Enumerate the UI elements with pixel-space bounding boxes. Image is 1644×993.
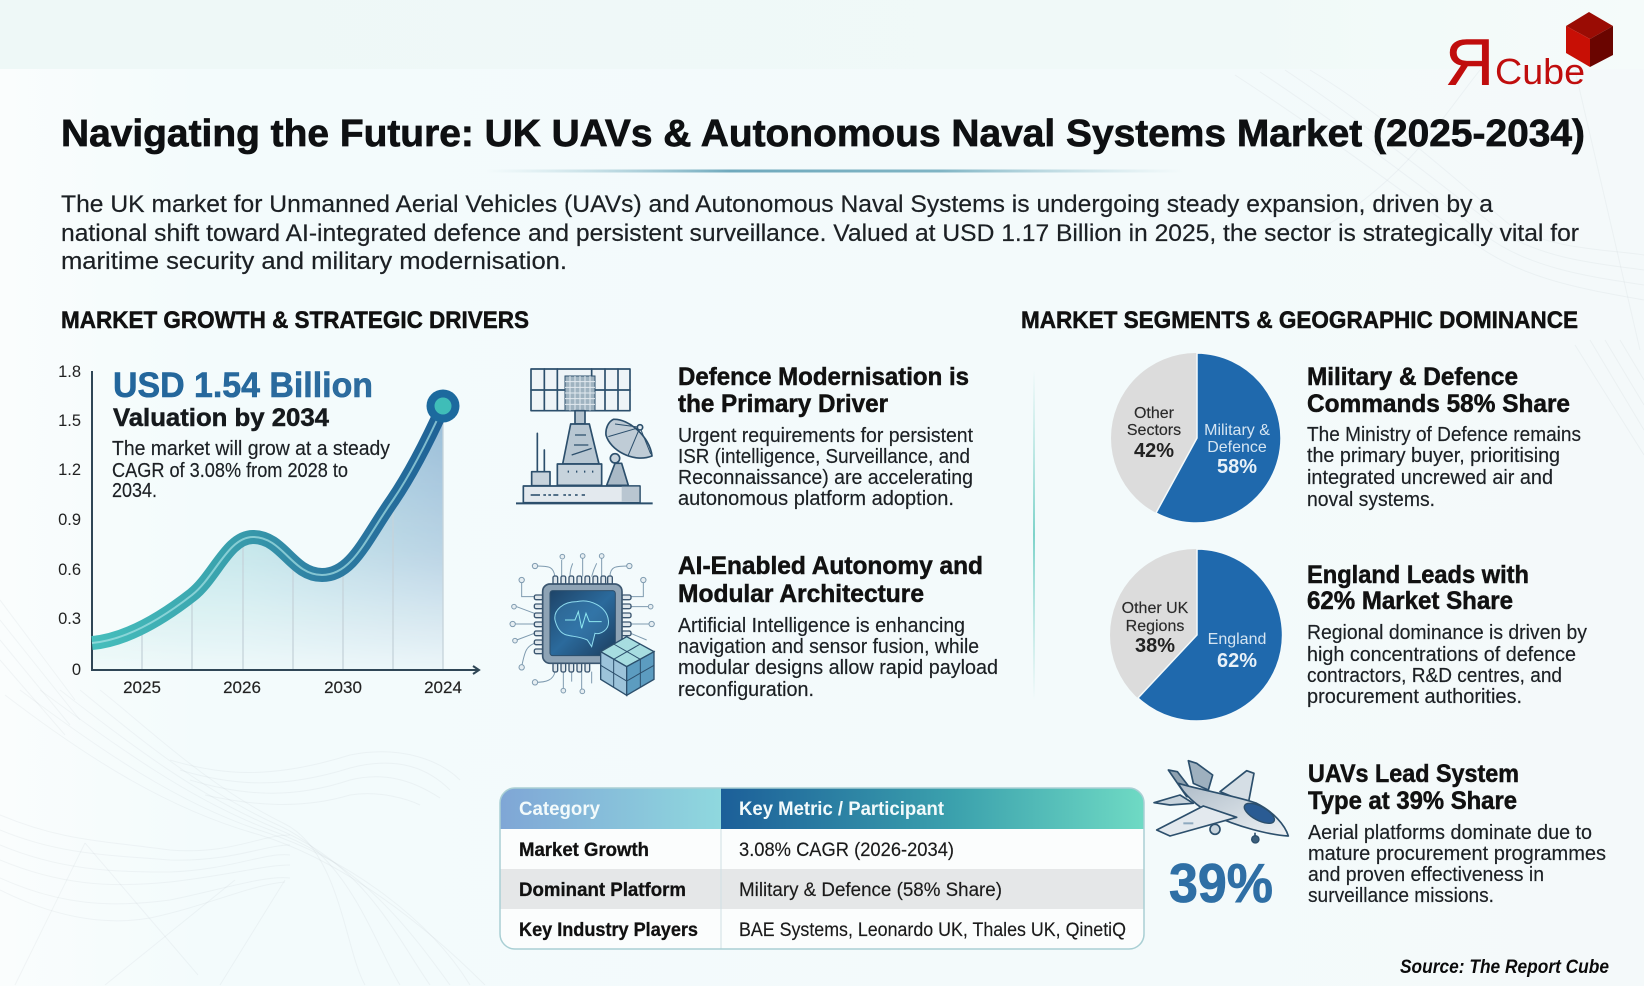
- y axis labels: 0: [72, 661, 81, 679]
- title underline: [486, 170, 1183, 172]
- driver body text: reconfiguration.: [678, 679, 814, 701]
- driver body text: ISR (intelligence, Surveillance, and: [678, 446, 970, 468]
- y axis labels: 1.5: [58, 412, 81, 430]
- title: Navigating the Future: UK UAVs & Autonomous Naval Systems Market (2025-2034): [61, 113, 1585, 155]
- x axis labels: 2030: [324, 678, 362, 697]
- x axis labels: 2024: [424, 678, 462, 697]
- intro paragraph: The UK market for Unmanned Aerial Vehicles (UAVs) and Autonomous Naval Systems is undergoing steady expansion, driven by a: [61, 191, 1494, 218]
- x axis labels: 2026: [223, 678, 261, 697]
- panel: military and defence share: [1111, 353, 1581, 523]
- segment body text: surveillance missions.: [1308, 885, 1494, 907]
- pie chart: 62 percent: England: [1208, 631, 1266, 648]
- logo: RCube: Я: [1445, 26, 1494, 100]
- table header text: [519, 799, 945, 820]
- pie chart: 62 percent: Regions: [1126, 618, 1184, 635]
- segment body text: [1307, 424, 1581, 511]
- segment heading: UAVs Lead System: [1308, 760, 1519, 788]
- heading: market segments and geographic dominance: MARKET SEGMENTS & GEOGRAPHIC DOMINANCE: [1021, 307, 1578, 334]
- segment body text: The Ministry of Defence remains: [1307, 424, 1581, 446]
- valuation callout: 2034.: [112, 480, 157, 502]
- row: market growth: [519, 840, 954, 861]
- segment body text: noval systems.: [1307, 489, 1435, 511]
- valuation callout: USD 1.54 Billion: [113, 366, 373, 405]
- driver heading: [678, 363, 969, 418]
- y axis labels: 1.2: [58, 461, 81, 479]
- pie chart: 58 percent: 42%: [1134, 440, 1174, 462]
- valuation callout: [112, 366, 390, 502]
- segment body text: [1307, 622, 1587, 708]
- intro paragraph: national shift toward AI-integrated defence and persistent surveillance. Valued at USD 1.17 Billion in 2025, the sector is strategically vital for: [61, 220, 1579, 247]
- panel: summary table: [500, 788, 1144, 949]
- logo: RCube: [1445, 12, 1613, 100]
- segment heading: Military & Defence: [1307, 363, 1518, 391]
- pie chart: 58 percent: [1111, 353, 1281, 523]
- driver heading: Defence Modernisation is: [678, 363, 969, 391]
- segment body text: [1308, 822, 1606, 907]
- row: key industry players: Key Industry Players: [519, 920, 698, 941]
- panel: england regional share: [1110, 549, 1587, 721]
- segment heading: [1307, 561, 1529, 615]
- driver body text: Reconnaissance) are accelerating: [678, 467, 973, 489]
- segment heading: England Leads with: [1307, 561, 1529, 589]
- row: market growth: 3.08% CAGR (2026-2034): [739, 840, 954, 861]
- segment body text: Aerial platforms dominate due to: [1308, 822, 1592, 844]
- pie chart: 62 percent: Other UK: [1122, 600, 1189, 617]
- driver heading: Modular Architecture: [678, 580, 924, 608]
- pie chart: 58 percent: Sectors: [1127, 422, 1181, 439]
- logo: RCube: Cube: [1495, 51, 1585, 92]
- icon: radar station: [516, 369, 653, 503]
- segment body text: contractors, R&D centres, and: [1307, 665, 1562, 687]
- heading: market growth and strategic drivers: MARKET GROWTH & STRATEGIC DRIVERS: [61, 307, 529, 334]
- row: market growth: Market Growth: [519, 840, 649, 861]
- pie chart: 58 percent: Military &: [1204, 422, 1270, 439]
- pie chart: 58 percent: Defence: [1207, 439, 1267, 456]
- y axis labels: 1.8: [58, 363, 81, 381]
- growth curve: [92, 407, 443, 643]
- y axis labels: 0.9: [58, 511, 81, 529]
- segment body text: mature procurement programmes: [1308, 843, 1606, 865]
- row: key industry players: [519, 920, 1126, 941]
- icon: jet aircraft: [1154, 761, 1288, 843]
- driver body text: Urgent requirements for persistent: [678, 425, 973, 447]
- driver body text: modular designs allow rapid payload: [678, 657, 998, 679]
- segment heading: [1307, 363, 1570, 418]
- chart area fill: [92, 407, 443, 670]
- table border: [500, 788, 1144, 949]
- driver body text: [678, 425, 973, 510]
- segment heading: [1308, 760, 1519, 815]
- row: dominant platform: Military & Defence (58% Share): [739, 880, 1002, 901]
- segment body text: and proven effectiveness in: [1308, 864, 1544, 886]
- driver body text: [678, 615, 998, 701]
- intro paragraph: maritime security and military modernisation.: [61, 248, 567, 275]
- y axis labels: 0.6: [58, 561, 81, 579]
- panel: UAV system type share: [1154, 760, 1606, 914]
- column divider: [1033, 370, 1035, 700]
- row: dominant platform: Dominant Platform: [519, 880, 686, 901]
- icon: AI chip and modular cube: [510, 554, 654, 695]
- panel: growth line chart: [58, 363, 479, 697]
- pie chart: 62 percent: 62%: [1217, 650, 1257, 672]
- driver heading: [678, 552, 983, 608]
- x axis labels: [123, 678, 462, 697]
- chart grid lines: [142, 415, 443, 670]
- segment heading: Type at 39% Share: [1308, 787, 1517, 815]
- intro paragraph: [61, 191, 1579, 275]
- end marker: [426, 390, 460, 422]
- source note: Source: The Report Cube: [1400, 957, 1609, 978]
- pie chart: 62 percent: 38%: [1135, 635, 1175, 657]
- driver heading: the Primary Driver: [678, 390, 888, 418]
- row: dominant platform: [519, 880, 1002, 901]
- segment heading: Commands 58% Share: [1307, 390, 1570, 418]
- pie chart: 58 percent: Other: [1134, 405, 1175, 422]
- table rows: [500, 788, 1144, 949]
- chart axes: [92, 371, 479, 674]
- segment heading: 62% Market Share: [1307, 587, 1513, 615]
- segment body text: procurement authorities.: [1307, 686, 1522, 708]
- table header text: Key Metric / Participant: [739, 799, 945, 820]
- y axis labels: [58, 363, 81, 679]
- valuation callout: Valuation by 2034: [113, 404, 329, 432]
- driver body text: Artificial Intelligence is enhancing: [678, 615, 965, 637]
- driver body text: navigation and sensor fusion, while: [678, 636, 979, 658]
- segment body text: Regional dominance is driven by: [1307, 622, 1587, 644]
- stat: 39 percent: 39%: [1169, 852, 1273, 914]
- row: key industry players: BAE Systems, Leonardo UK, Thales UK, QinetiQ: [739, 920, 1126, 941]
- x axis labels: 2025: [123, 678, 161, 697]
- pie chart: 58 percent: 58%: [1217, 456, 1257, 478]
- panel: defence modernisation driver: [516, 363, 973, 510]
- y axis labels: 0.3: [58, 610, 81, 628]
- driver body text: autonomous platform adoption.: [678, 488, 954, 510]
- segment body text: integrated uncrewed air and: [1307, 467, 1553, 489]
- pie chart: 62 percent: [1110, 549, 1283, 721]
- segment body text: high concentrations of defence: [1307, 644, 1576, 666]
- panel: AI-enabled autonomy driver: [510, 552, 998, 701]
- segment body text: the primary buyer, prioritising: [1307, 445, 1560, 467]
- driver heading: AI-Enabled Autonomy and: [678, 552, 983, 580]
- valuation callout: CAGR of 3.08% from 2028 to: [112, 460, 348, 482]
- table header text: Category: [519, 799, 600, 820]
- valuation callout: The market will grow at a steady: [112, 438, 390, 460]
